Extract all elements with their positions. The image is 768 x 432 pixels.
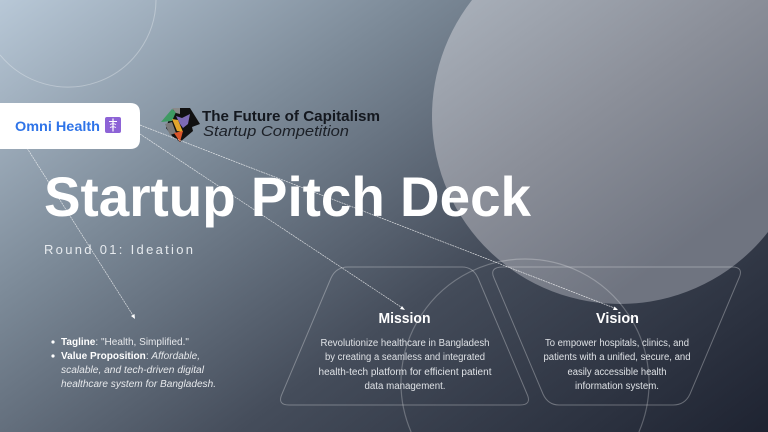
mission heading: Mission [378,310,430,327]
mission text: Revolutionize healthcare in Bangladesh [320,338,490,349]
panel: mission outline [281,267,528,405]
vision text [544,338,690,392]
large circle [432,0,768,304]
arrow: logo to tagline [27,148,135,319]
text block: tagline and value proposition: Tagline: "Health, Simplified." [61,337,190,348]
icon: medical symbol [105,117,121,133]
subtitle: Round 01: Ideation [44,242,193,257]
logo card [0,103,140,149]
text block: tagline and value proposition: scalable, and tech-driven digital [61,365,205,376]
vision text: easily accessible health [568,367,666,378]
competition name [202,108,380,140]
logo wordmark: Omni Health [15,118,100,134]
mission text: by creating a seamless and integrated [325,352,485,363]
vision text: To empower hospitals, clinics, and [545,338,689,349]
mission text [318,338,492,392]
mission text: data management. [364,381,446,392]
competition name: The Future of Capitalism [202,108,380,125]
text block: tagline and value proposition [51,337,216,390]
outline circle bottom [401,259,649,432]
outline circle top left [0,0,156,87]
title: Startup Pitch Deck [44,165,532,228]
text block: tagline and value proposition: Value Proposition: Affordable, [61,351,200,362]
vision text: patients with a unified, secure, and [544,352,690,363]
arrow: logo to mission [140,134,405,310]
text block: tagline and value proposition: healthcare system for Bangladesh. [61,379,216,390]
competition logo icon [161,108,200,142]
competition subtitle: Startup Competition [203,123,349,140]
panel: vision outline [493,267,740,405]
arrow: logo to vision [140,125,618,310]
vision heading: Vision [596,310,639,327]
vision text: information system. [575,381,659,392]
mission text: health-tech platform for efficient patient [318,367,492,378]
